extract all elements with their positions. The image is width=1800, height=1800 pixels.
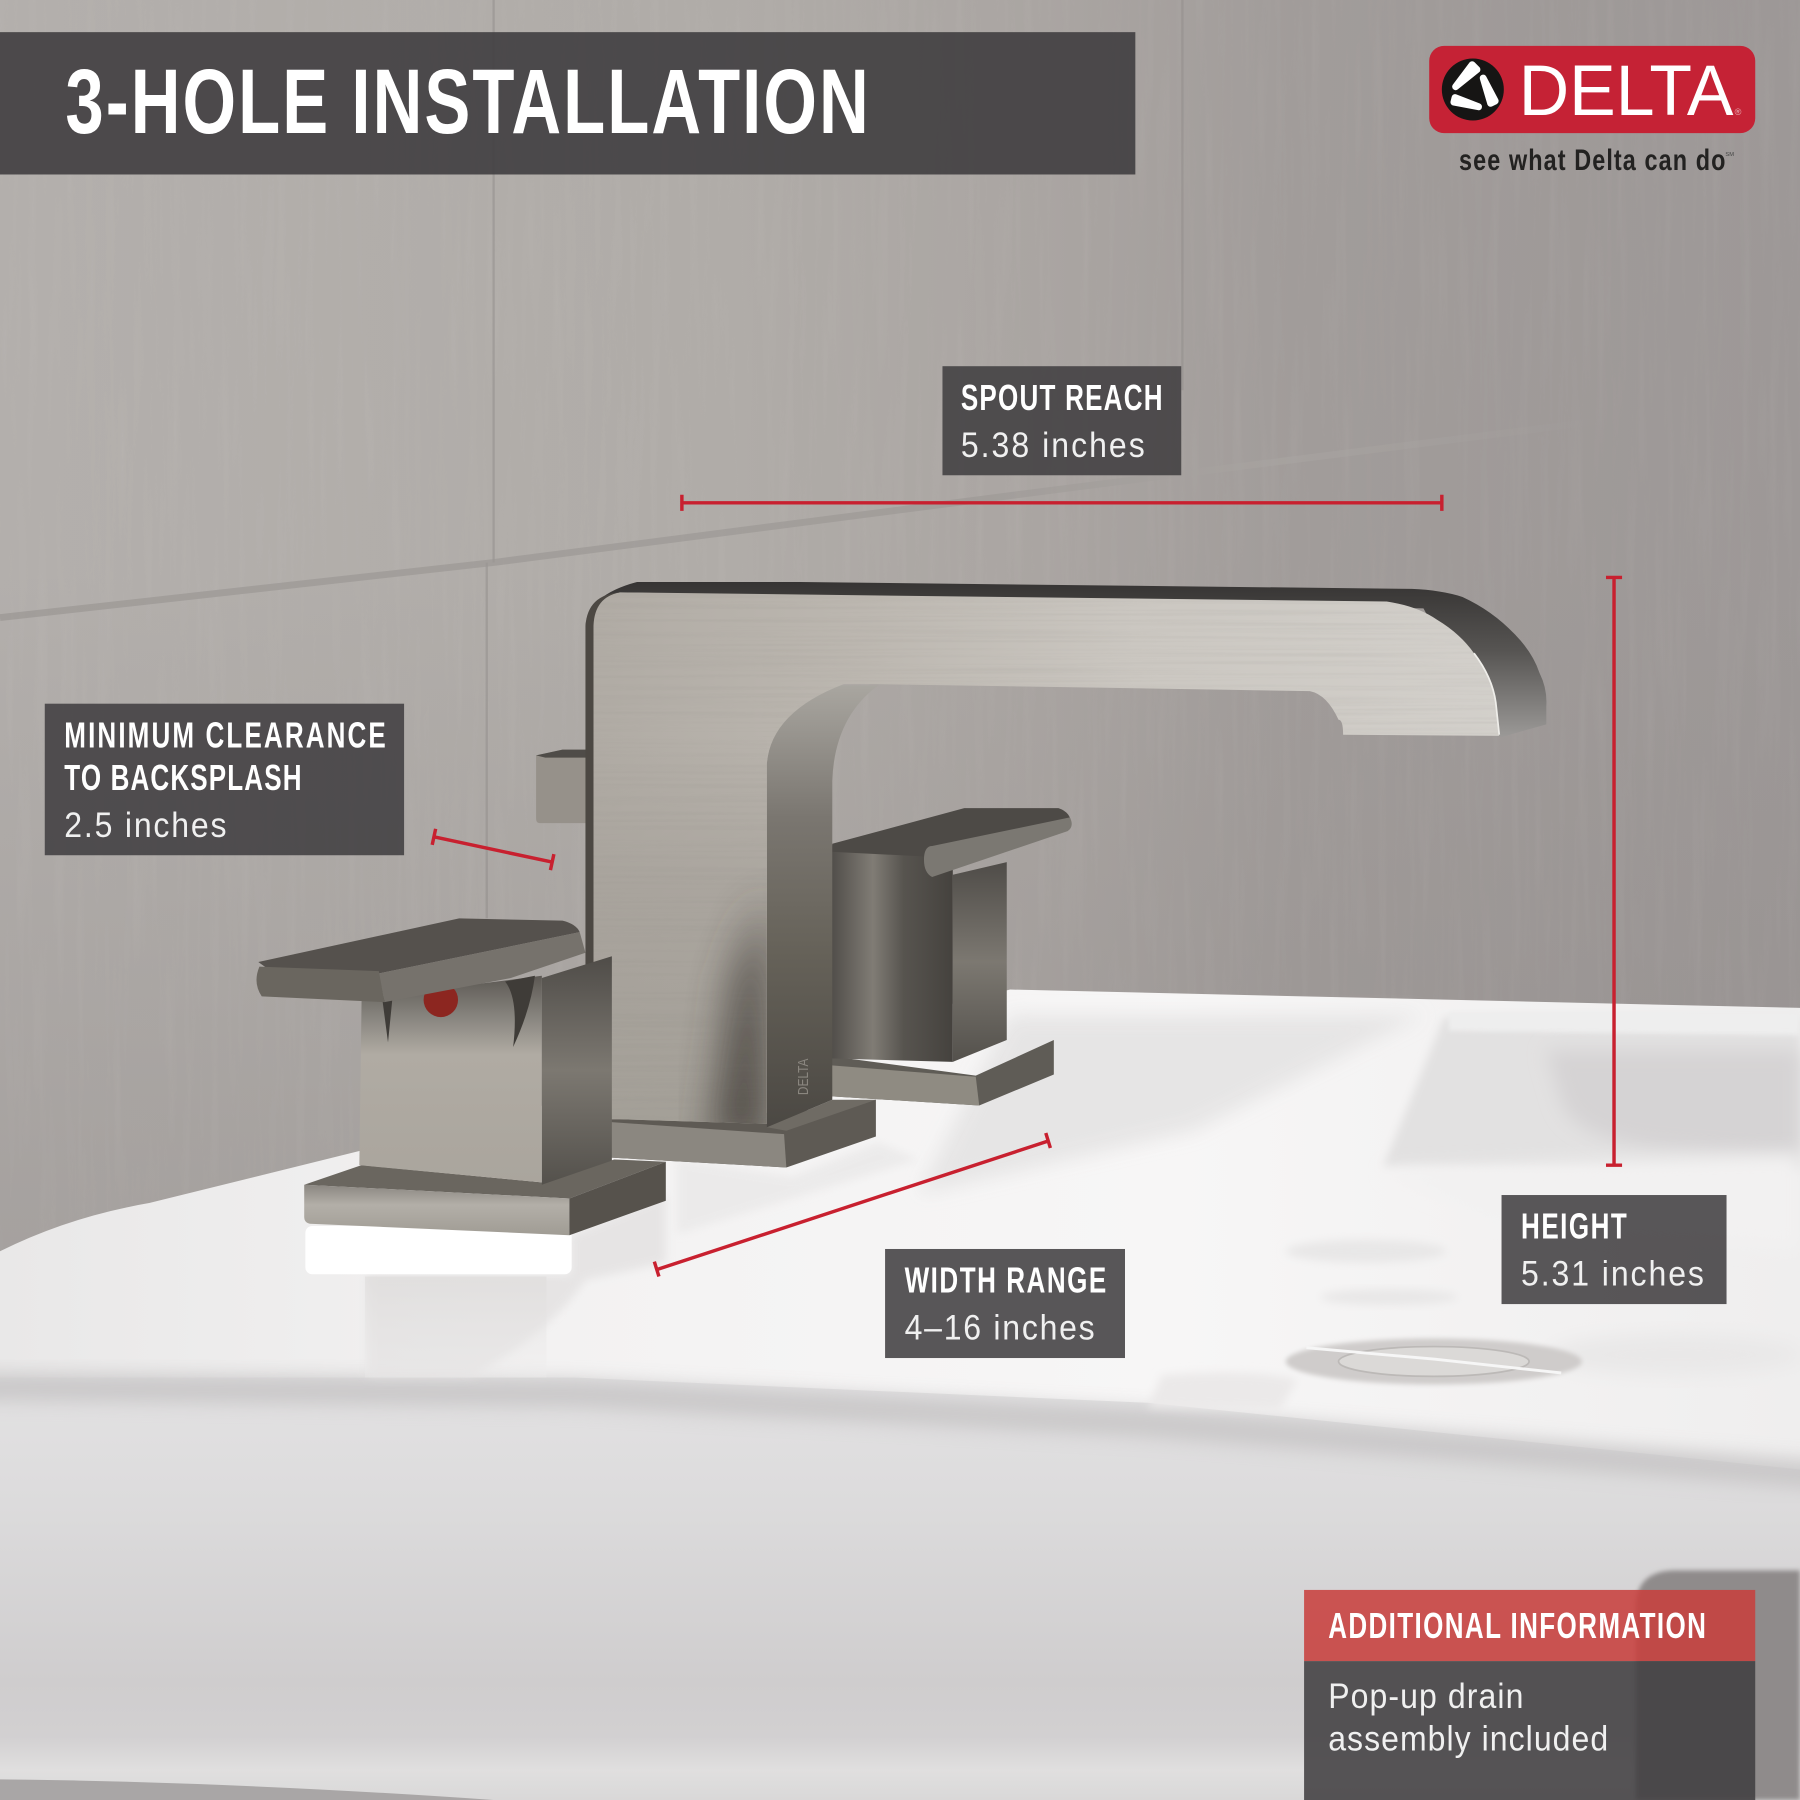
registered mark: ® (1735, 107, 1742, 117)
panel header: ADDITIONAL INFORMATION (1328, 1605, 1706, 1646)
Delta logo (1429, 46, 1755, 177)
back handle (830, 808, 1072, 1105)
panel: additional information (1304, 1590, 1755, 1800)
spout left edge (585, 592, 620, 1119)
spout top dark edge (585, 582, 1546, 737)
callout: width range: WIDTH RANGE (905, 1259, 1106, 1301)
title banner: 3-HOLE INSTALLATION (65, 52, 869, 154)
front handle (256, 918, 666, 1235)
spout inner curve (767, 685, 878, 1127)
hot indicator dot (424, 983, 458, 1017)
logo wordmark: DELTA (1519, 52, 1734, 131)
counter shadow lower right (1636, 1570, 1800, 1800)
drain (1148, 1339, 1582, 1410)
callout: spout reach (942, 366, 1181, 475)
spout base (603, 1100, 876, 1167)
callout: minimum clearance: MINIMUM CLEARANCE (64, 714, 386, 755)
title banner (0, 32, 1135, 174)
dimension line: clearance (432, 829, 554, 870)
embossed maker mark: DELTA (795, 1058, 811, 1095)
background: white sink (0, 990, 1800, 1800)
callout: height (1502, 1195, 1727, 1304)
dimension line: spout reach (682, 495, 1442, 511)
callout: minimum clearance (45, 704, 404, 855)
spout front face (585, 585, 1504, 1148)
callout: height: HEIGHT (1521, 1205, 1627, 1247)
panel body (1304, 1661, 1755, 1800)
faucet reflection (305, 1142, 918, 1378)
callout: minimum clearance: 2.5 inches (64, 805, 226, 845)
callout: minimum clearance: TO BACKSPLASH (64, 757, 301, 798)
faucet illustration (256, 582, 1546, 1235)
logo mark (1442, 59, 1504, 121)
dimension line: height (1606, 577, 1622, 1165)
callout: spout reach: 5.38 inches (961, 425, 1145, 465)
panel body: assembly included (1328, 1719, 1608, 1759)
callout: spout reach: SPOUT REACH (961, 377, 1163, 418)
callout: width range (885, 1249, 1125, 1358)
front handle body (359, 976, 542, 1182)
panel header (1304, 1590, 1755, 1661)
callout: height: 5.31 inches (1521, 1254, 1704, 1294)
dimension line: width range (654, 1133, 1050, 1277)
front handle base (304, 1159, 666, 1235)
service mark: SM (1725, 152, 1734, 158)
callout: width range: 4–16 inches (905, 1308, 1095, 1348)
panel body: Pop-up drain (1328, 1677, 1523, 1717)
back tab (536, 750, 588, 823)
handle reflections (382, 976, 535, 1047)
tagline: see what Delta can do (1459, 143, 1725, 177)
spout tip side highlight (1474, 653, 1499, 735)
front handle lever (256, 918, 585, 1002)
background: tiled wall (0, 0, 1800, 1286)
